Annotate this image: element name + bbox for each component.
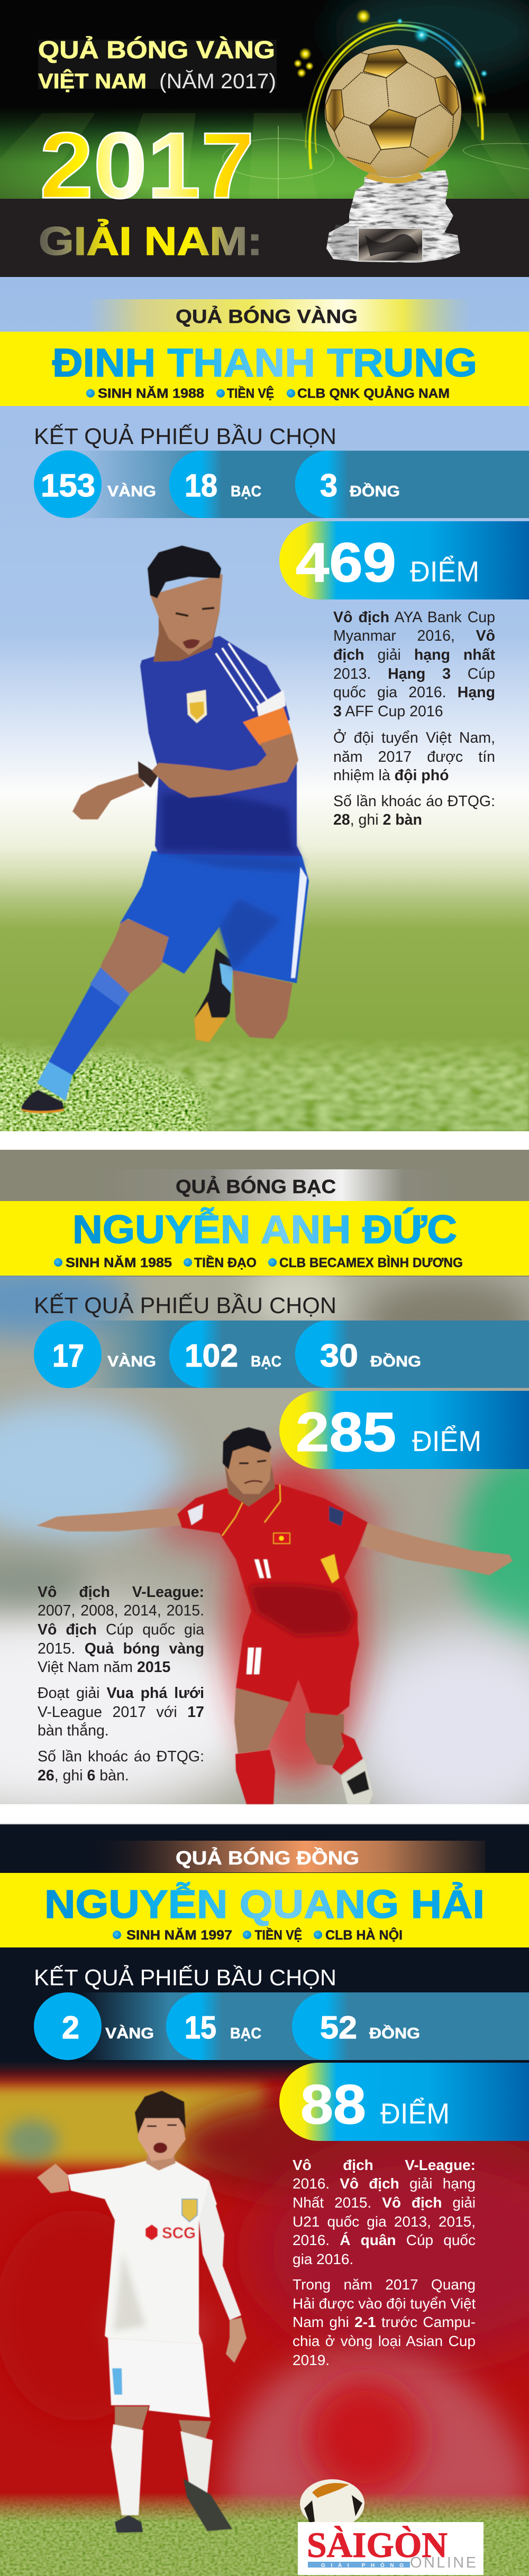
player facts [54,1255,463,1270]
name band: NGUYỄN ANH ĐỨC [72,1207,457,1252]
heading: Quả Bóng Vàng Việt Nam: (NĂM 2017) [159,69,276,93]
text block: Đinh Thanh Trung titles [333,609,495,720]
total points pill [279,2063,529,2141]
text block: Nguyễn Anh Đức caps: 26, ghi 6 bàn. [38,1767,129,1784]
text block: Nguyễn Anh Đức caps: Số lần khoác áo ĐTQG: [38,1748,204,1765]
logo: Sài Gòn Giải Phóng Online: GIẢI PHÓNG [321,2562,404,2569]
award ribbon [88,1169,472,1201]
heading: Quả Bóng Vàng Việt Nam [38,36,276,93]
player facts: TIỀN VỆ [227,385,274,401]
vote heading: KẾT QUẢ PHIẾU BẦU CHỌN [34,423,336,449]
vote tally bar: ĐỒNG [350,482,400,500]
vote tally bar: 17 [52,1338,84,1373]
vote tally bar: BẠC [231,483,261,500]
vote tally bar: 153 [41,468,95,503]
text block: Nguyễn Quang Hải titles [293,2157,476,2267]
vote tally bar: BẠC [230,2025,261,2042]
player photo: Nguyễn Quang Hải [37,2091,247,2533]
panel: gold ball winner [0,277,529,1131]
text block: Đinh Thanh Trung caps [333,793,495,828]
award ribbon: QUẢ BÓNG ĐỒNG [176,1846,359,1869]
text block: Nguyễn Anh Đức top scorer [38,1685,204,1739]
stadium background [0,0,529,211]
text block: Nguyễn Quang Hải national team [293,2276,476,2368]
player facts: CLB QNK QUẢNG NAM [297,385,450,401]
text block: Đinh Thanh Trung titles: quốc gia 2016. Hạng [333,684,495,701]
vote tally bar: 18 [185,468,217,503]
grass foreground [0,1038,529,1131]
text block: Nguyễn Quang Hải national team: Trong năm 2017 Quang [293,2276,476,2293]
player facts [86,385,450,401]
total points pill: ĐIỂM [410,555,479,588]
heading: Giải Nam: GIẢI NAM: [39,219,262,263]
award ribbon [88,299,472,331]
text block: Nguyễn Anh Đức titles [38,1584,204,1676]
total points pill [279,521,529,599]
player facts: SINH NĂM 1997 [126,1927,232,1943]
white top divider [0,1824,529,1825]
player facts: TIỀN ĐẠO [194,1255,257,1270]
trophy base [326,170,460,263]
name band [0,332,529,406]
vote tally bar: VÀNG [105,2024,154,2042]
text block: Đinh Thanh Trung national team role [333,729,495,784]
award ribbon: QUẢ BÓNG VÀNG [176,305,358,327]
text block: Nguyễn Anh Đức top scorer: bàn thắng. [38,1722,109,1739]
text block: Nguyễn Anh Đức caps [38,1748,204,1784]
award ribbon: QUẢ BÓNG BẠC [176,1175,336,1197]
player photo: Nguyễn Quang Hải: SCG [162,2224,196,2242]
vote heading: KẾT QUẢ PHIẾU BẦU CHỌN [34,1292,336,1318]
panel background [0,277,529,1131]
match ball [300,2479,364,2528]
text block: Nguyễn Quang Hải titles: gia 2016. [293,2251,353,2267]
vote tally bar [34,450,529,518]
vote tally bar: 15 [185,2010,216,2045]
name band: NGUYỄN QUANG HẢI [44,1882,485,1926]
vote tally bar: ĐỒNG [369,2024,420,2042]
text block: Nguyễn Anh Đức titles: Vô địch Cúp quốc gia [38,1621,204,1638]
name band [0,1201,529,1276]
vote tally bar: 2 [62,2010,79,2045]
white gap [0,1804,529,1824]
text block: Đinh Thanh Trung national team role: năm 2017 được tín [333,749,495,765]
text block: Nguyễn Quang Hải titles: Vô địch V-League: [293,2157,476,2173]
text block: Đinh Thanh Trung titles: 2013. Hạng 3 Cúp [333,666,495,682]
vote tally bar [34,1992,529,2060]
total points pill [279,1391,529,1469]
vote tally bar [34,1321,529,1388]
player facts: SINH NĂM 1985 [66,1255,172,1270]
player facts: TIỀN VỆ [255,1927,302,1943]
vote tally bar: 52 [320,2010,357,2045]
player facts: SINH NĂM 1988 [98,386,204,401]
panel: bronze ball winner [0,1818,529,2576]
vote heading: KẾT QUẢ PHIẾU BẦU CHỌN [34,1964,336,1991]
logo: Sài Gòn Giải Phóng Online [298,2522,484,2575]
total points pill: ĐIỂM [380,2097,450,2130]
player facts: CLB BECAMEX BÌNH DƯƠNG [279,1255,463,1270]
player facts [113,1927,403,1943]
text block: Đinh Thanh Trung caps: 28, ghi 2 bàn [333,811,422,828]
text block: Đinh Thanh Trung national team role: nhiệm là đội phó [333,767,449,784]
player facts: CLB HÀ NỘI [325,1927,403,1943]
vote tally bar: VÀNG [107,1352,156,1370]
text block: Đinh Thanh Trung national team role: Ở đội tuyển Việt Nam, [333,730,495,746]
text block: Nguyễn Anh Đức top scorer: Đoạt giải Vua phá lưới [38,1685,204,1702]
player photo: Nguyễn Anh Đức [37,1427,513,1804]
text block: Nguyễn Quang Hải national team: chia ở vòng loại Asian Cup [293,2333,476,2349]
text block: Nguyễn Quang Hải national team: Hải được vào đội tuyển Việt [293,2295,476,2312]
text block: Nguyễn Quang Hải national team: Nam ghi 2-1 trước Campu- [293,2314,476,2330]
glowing rings and sparks [294,9,488,169]
vote tally bar: VÀNG [107,482,156,500]
text block: Nguyễn Quang Hải titles: 2016. Vô địch giải hạng [293,2175,476,2192]
award ribbon [83,1841,486,1872]
header panel [0,0,529,277]
text block: Nguyễn Anh Đức titles: Vô địch V-League: [38,1584,204,1601]
text block: Nguyễn Anh Đức titles: 2007, 2008, 2014, 2015. [38,1602,204,1619]
icon: golden ball trophy [325,45,461,263]
text block: Đinh Thanh Trung caps: Số lần khoác áo ĐTQG: [333,793,495,810]
logo: Sài Gòn Giải Phóng Online: ONLINE [410,2554,476,2571]
vote tally bar: ĐỒNG [370,1352,421,1370]
blurred stadium background [0,1818,529,2576]
total points pill: 285 [296,1401,396,1463]
name band: ĐINH THANH TRUNG [52,340,477,385]
text block: Nguyễn Quang Hải national team: 2019. [293,2352,330,2368]
text block: Đinh Thanh Trung titles: địch giải hạng nhất [333,647,495,663]
player photo: Đinh Thanh Trung [22,546,309,1113]
panel: silver ball winner [0,1150,529,1834]
vote tally bar: BẠC [251,1353,281,1370]
heading: Quả Bóng Vàng Việt Nam: VIỆT NAM [38,69,147,93]
vote tally bar: 102 [185,1338,238,1373]
vote tally bar: 3 [320,468,338,503]
text block: Nguyễn Quang Hải titles: U21 quốc gia 2013, 2015, [293,2213,476,2230]
total points pill: 469 [296,532,396,594]
text block: Đinh Thanh Trung titles: Myanmar 2016, Vô [333,627,495,644]
text block: Nguyễn Anh Đức titles: Việt Nam năm 2015 [38,1659,170,1676]
vote tally bar: 30 [320,1338,358,1373]
blurred stadium background [0,1150,529,1834]
title: dark band [0,199,529,277]
total points pill: ĐIỂM [412,1425,481,1457]
text block: Đinh Thanh Trung titles: Vô địch AYA Bank Cup [333,609,495,626]
total points pill: 88 [300,2074,366,2136]
text block: Đinh Thanh Trung titles: 3 AFF Cup 2016 [333,703,443,720]
big year 2017: 2017 [40,113,254,218]
name band [0,1873,529,1947]
text block: Nguyễn Quang Hải titles: 2016. Á quân Cúp quốc [293,2232,476,2248]
text block: Nguyễn Anh Đức titles: 2015. Quả bóng vàng [38,1640,204,1657]
logo: Sài Gòn Giải Phóng Online: SÀIGÒN [307,2525,448,2565]
text block: Nguyễn Anh Đức top scorer: V-League 2017 với 17 [38,1704,204,1721]
text block: Nguyễn Quang Hải titles: Nhất 2015. Vô địch giải [293,2194,476,2211]
heading: Quả Bóng Vàng Việt Nam: QUẢ BÓNG VÀNG [38,36,275,63]
soccer ball [325,45,461,183]
